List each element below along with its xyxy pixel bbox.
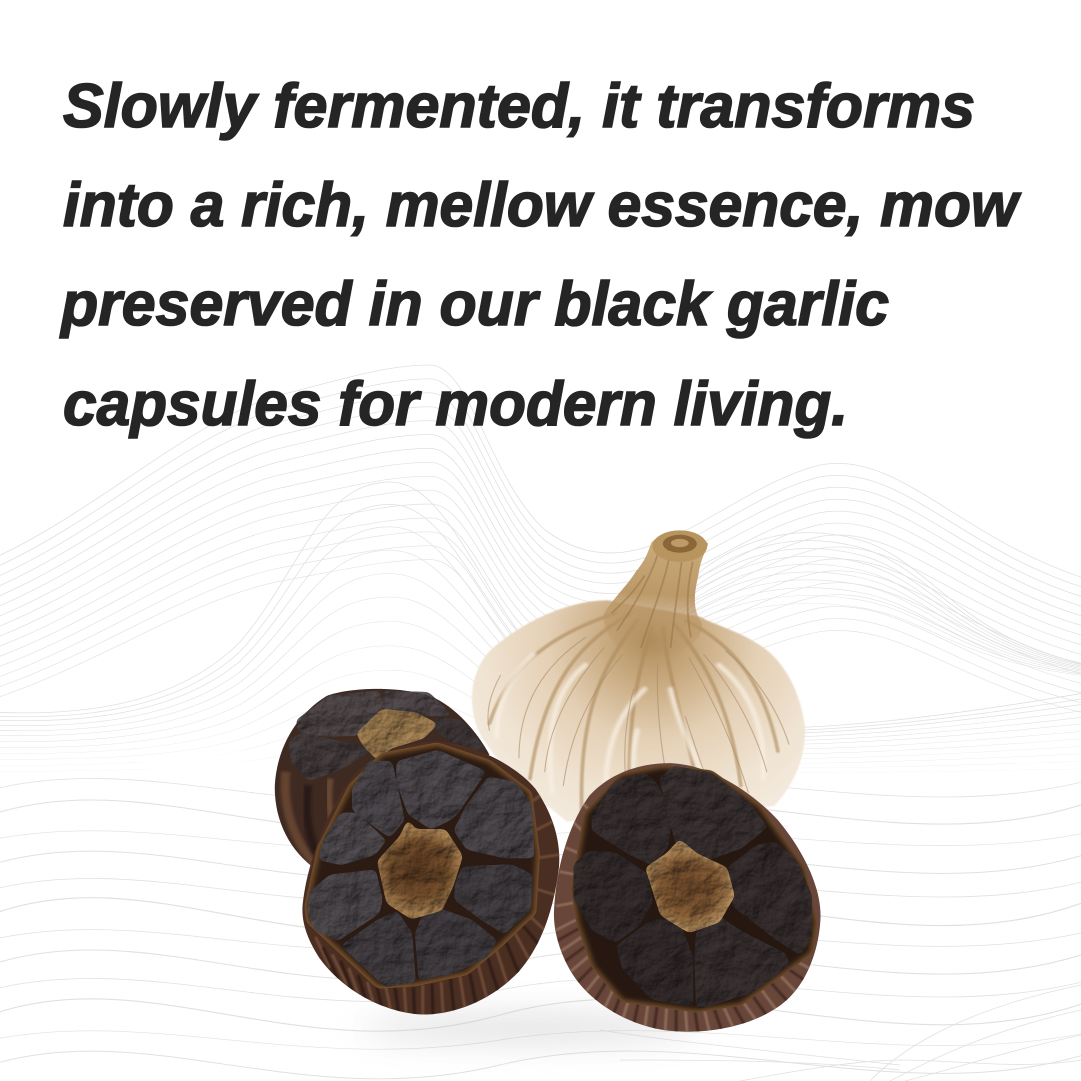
background: flowing line waves <box>0 365 1081 1081</box>
garlic stem <box>604 531 708 658</box>
black garlic: front left bulb <box>302 741 561 1016</box>
front left cloves <box>309 751 533 986</box>
garlic illustration group <box>275 530 821 1033</box>
front left cut face <box>306 744 538 987</box>
black garlic: front right bulb <box>554 763 821 1033</box>
garlic shadow <box>360 1014 700 1042</box>
back bulb core <box>358 710 436 759</box>
front left core <box>378 822 462 918</box>
heading text: Slowly fermented, it transforms <box>63 72 975 141</box>
front right core <box>647 841 733 932</box>
front right cloves <box>575 767 811 1009</box>
heading text: into a rich, mellow essence, mow <box>63 171 1022 240</box>
white garlic bulb <box>472 530 805 822</box>
heading text <box>59 72 1022 439</box>
heading text: capsules for modern living. <box>63 370 848 439</box>
front right cut face <box>573 767 816 1011</box>
black garlic: back bulb <box>275 689 489 869</box>
heading text: preserved in our black garlic <box>59 270 889 339</box>
